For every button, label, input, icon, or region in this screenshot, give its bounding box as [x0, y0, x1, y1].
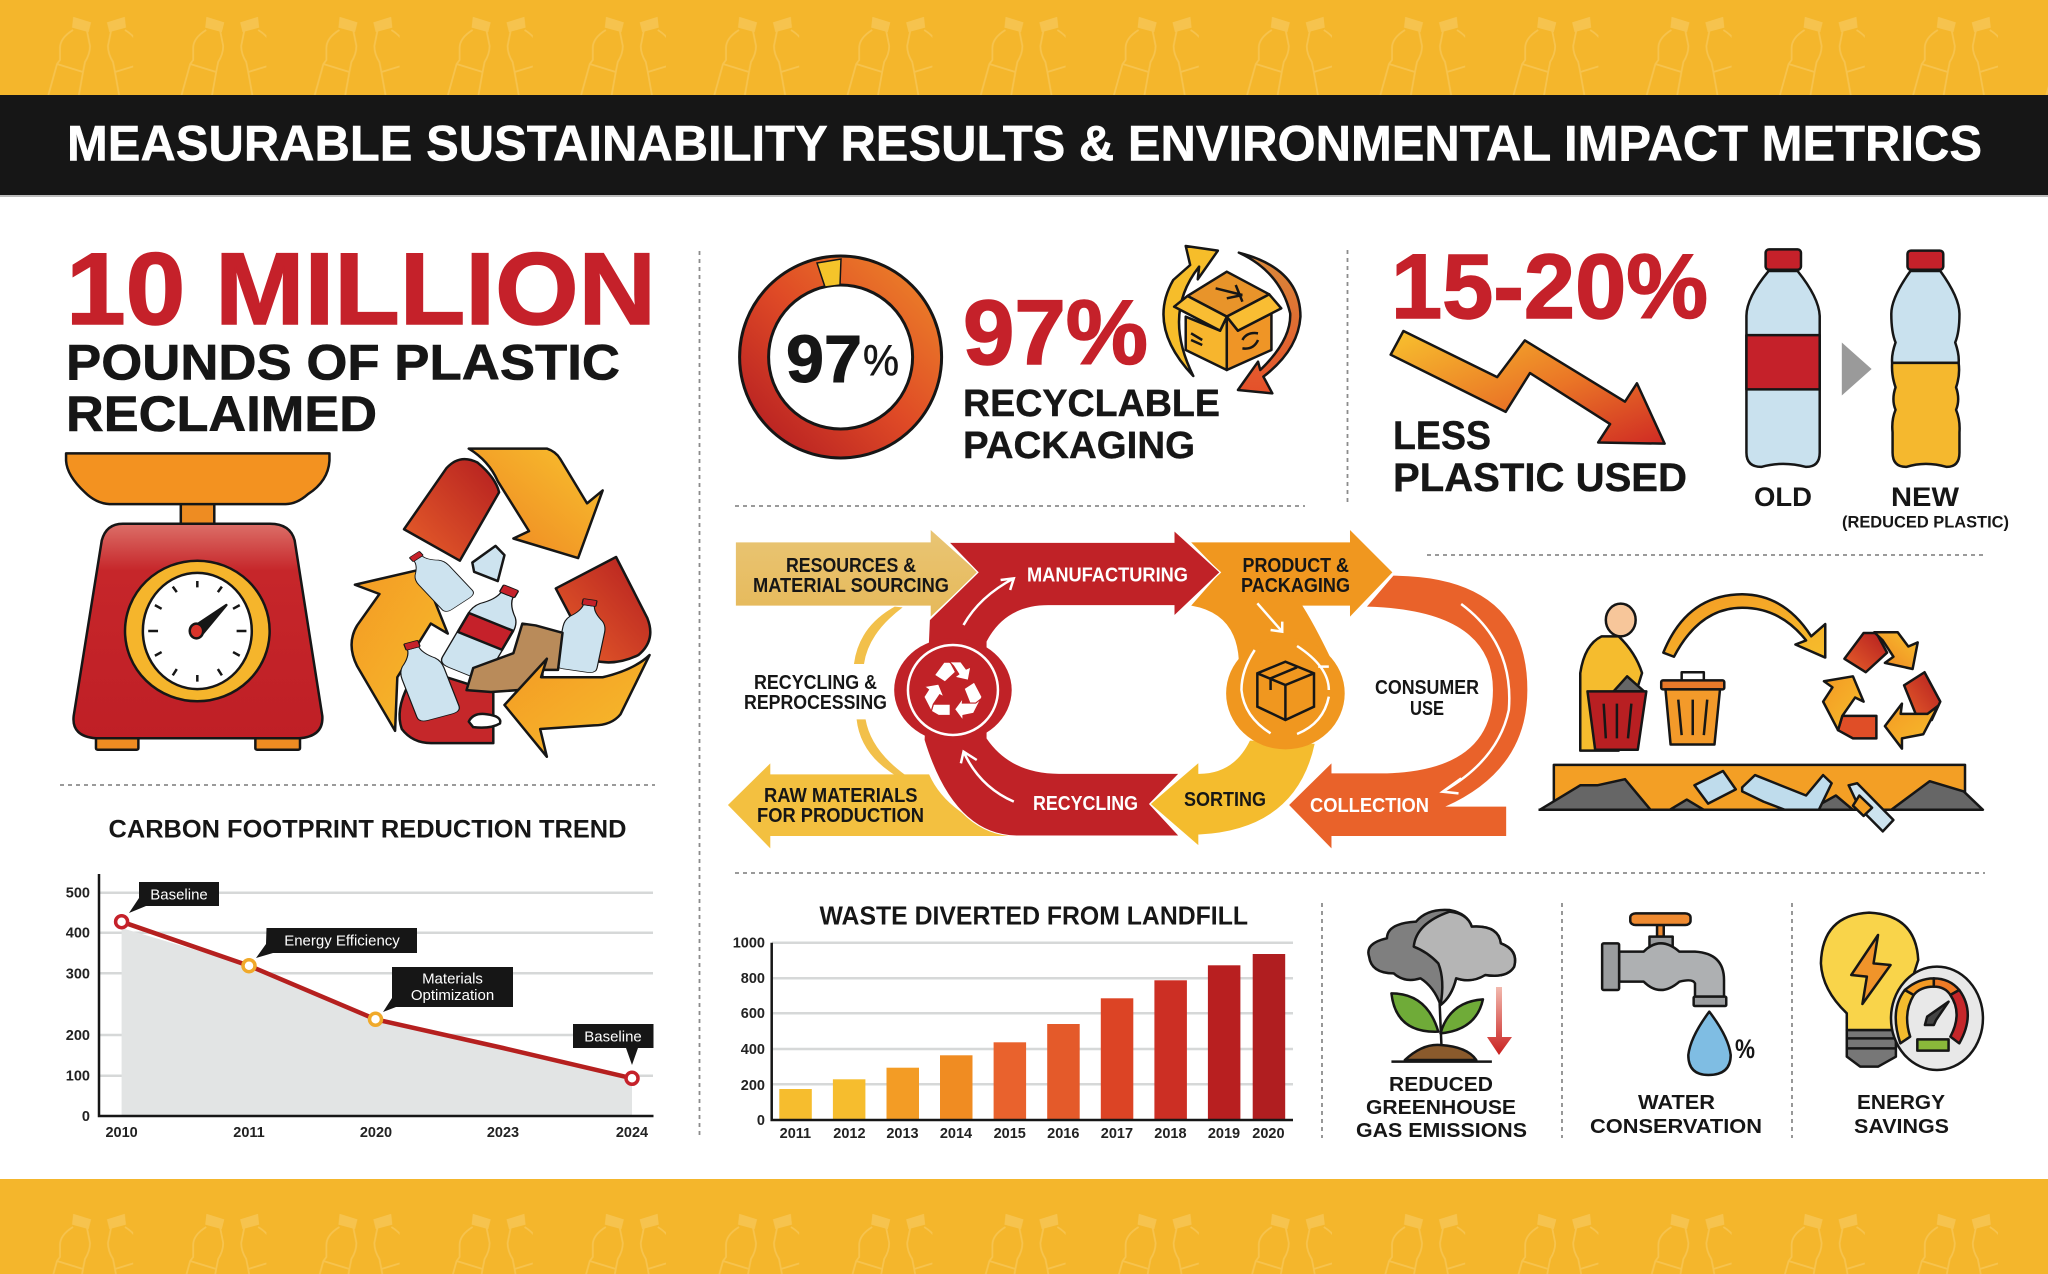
callout: baseline end: Baseline: [584, 1028, 642, 1046]
top banner: [0, 0, 2048, 95]
node: recycling: [894, 638, 1012, 742]
callout: baseline start: Baseline: [150, 886, 208, 904]
x axis labels: 2020: [1252, 1126, 1285, 1142]
y axis labels: [66, 886, 90, 1125]
label: product and packaging: PRODUCT &: [1242, 554, 1349, 577]
x axis labels: 2010: [105, 1125, 138, 1141]
label: raw materials: RAW MATERIALS: [764, 784, 918, 807]
panel: waste bar chart: [733, 900, 1293, 1142]
panel: circular economy loop: USE: [1410, 698, 1444, 720]
y axis labels: 0: [82, 1109, 90, 1125]
callout: baseline start: [129, 882, 219, 913]
illustration: person sorting waste: [1539, 594, 1983, 831]
big number: 15-20%: 15-20%: [1391, 236, 1708, 338]
axes: [99, 874, 654, 1116]
y axis labels: 300: [66, 966, 90, 982]
panel: circular economy loop: REPROCESSING: [744, 692, 887, 714]
y axis labels: 200: [741, 1078, 765, 1094]
x axis labels: 2014: [940, 1126, 972, 1142]
label: old: OLD: [1754, 482, 1812, 512]
x axis labels: 2020: [360, 1125, 392, 1141]
label: ENERGY: [1857, 1091, 1945, 1114]
bars: [779, 954, 1285, 1120]
chart title: WASTE DIVERTED FROM LANDFILL: [820, 900, 1248, 930]
label: plastic used: PLASTIC USED: [1393, 456, 1687, 500]
panel: less plastic used: [1391, 236, 2009, 532]
label: [1854, 1091, 1949, 1138]
callout: energy efficiency: Energy Efficiency: [284, 932, 400, 950]
trend line: [122, 922, 632, 1078]
arrow: sorting: [1150, 740, 1316, 847]
icon: light bulb and gauge: [1821, 913, 1983, 1070]
icon: curved arrow: [1663, 594, 1825, 658]
title bar: [0, 95, 2048, 197]
node: packaging: [1226, 637, 1345, 749]
label: resources and material sourcing: RESOURCES &: [786, 554, 916, 577]
label: REDUCED: [1389, 1073, 1493, 1096]
icon: white recycling symbol: [924, 662, 982, 721]
x axis labels: 2019: [1208, 1126, 1240, 1142]
y axis labels: 100: [66, 1068, 90, 1084]
donut chart: [740, 256, 942, 458]
y axis labels: 600: [741, 1006, 765, 1022]
x axis labels: [780, 1126, 1285, 1142]
x axis labels: 2012: [833, 1126, 866, 1142]
icon: kitchen scale: [66, 453, 329, 750]
y axis labels: 200: [66, 1028, 90, 1044]
label: recycling: RECYCLING: [1033, 793, 1138, 815]
panel: plastic reclaimed: [66, 232, 656, 757]
panel: carbon footprint line chart: [66, 816, 654, 1141]
icon: new bottle: [1891, 251, 1960, 467]
icon: arrow between bottles: [1842, 342, 1872, 396]
icon: old bottle: [1746, 249, 1820, 467]
data points: [116, 916, 638, 1084]
label: reduced plastic: (REDUCED PLASTIC): [1842, 512, 2009, 532]
panel: greenhouse gas: [1356, 910, 1527, 1142]
x axis labels: 2011: [233, 1125, 265, 1141]
label: GAS EMISSIONS: [1356, 1119, 1527, 1142]
x axis labels: 2013: [886, 1126, 919, 1142]
big number: 10 million: 10 MILLION: [66, 232, 656, 346]
panel: circular economy loop: MATERIAL SOURCING: [753, 574, 949, 597]
y axis labels: 400: [66, 926, 90, 942]
label: sorting: SORTING: [1184, 789, 1266, 811]
y axis labels: 1000: [733, 936, 765, 952]
label: [1356, 1073, 1527, 1142]
callout: materials optimization: Optimization: [411, 987, 494, 1004]
y axis labels: 0: [757, 1113, 765, 1129]
x axis labels: 2024: [616, 1125, 648, 1141]
arrow: resources: [736, 530, 978, 617]
donut chart: 97: [786, 322, 862, 397]
title bar: MEASURABLE SUSTAINABILITY RESULTS & ENVIRONMENTAL IMPACT METRICS: [67, 116, 1982, 172]
percent sign: %: [1735, 1034, 1755, 1064]
chart title: CARBON FOOTPRINT REDUCTION TREND: [108, 816, 626, 844]
icon: zigzag down arrow: [1391, 331, 1665, 444]
axes: [772, 943, 1293, 1120]
icon: landfill: [1539, 765, 1983, 831]
label: CONSERVATION: [1590, 1115, 1762, 1138]
gridlines: [99, 893, 653, 1076]
y axis labels: 800: [741, 971, 765, 987]
loop shapes: [728, 530, 1527, 848]
icon: down arrow: [1487, 987, 1512, 1055]
thin gold connector: [854, 607, 905, 775]
heading: pounds of plastic: POUNDS OF PLASTIC: [66, 334, 620, 390]
label: collection: COLLECTION: [1310, 794, 1429, 817]
big number: 97%: 97%: [963, 282, 1148, 384]
label: GREENHOUSE: [1366, 1096, 1516, 1119]
icon: person: [1580, 604, 1646, 751]
label: [1590, 1091, 1762, 1138]
x axis labels: [105, 1125, 648, 1141]
arrow: product and packaging: [1191, 530, 1392, 660]
x axis labels: 2023: [487, 1125, 519, 1141]
y axis labels: [733, 936, 765, 1129]
callout: baseline end: [573, 1024, 654, 1065]
x axis labels: 2017: [1101, 1126, 1133, 1142]
icon: faucet and drop: [1602, 913, 1731, 1075]
icon: smoke cloud and plant: [1368, 910, 1515, 1062]
panel: circular economy loop: [728, 530, 1527, 848]
x axis labels: 2011: [780, 1126, 811, 1142]
donut chart: %: [863, 336, 899, 385]
panel: water conservation: [1590, 913, 1762, 1138]
icon: box with recycling arrows: [1163, 246, 1300, 393]
icon: small recycling symbol: [1823, 632, 1940, 749]
label: less: LESS: [1393, 414, 1491, 458]
x axis labels: 2015: [994, 1126, 1026, 1142]
bottom banner: [0, 1179, 2048, 1274]
panel: energy savings: [1821, 913, 1983, 1138]
x axis labels: 2016: [1047, 1126, 1079, 1142]
icon: orange bin: [1661, 672, 1724, 744]
callout: materials optimization: [383, 967, 513, 1012]
label: recyclable: RECYCLABLE: [963, 383, 1220, 425]
label: packaging: PACKAGING: [963, 425, 1195, 467]
arrow: raw materials: [728, 763, 1014, 848]
x axis labels: 2018: [1154, 1126, 1187, 1142]
panel: circular economy loop: FOR PRODUCTION: [757, 804, 924, 827]
band: consumer use and collection: [1289, 576, 1527, 848]
y axis labels: 400: [741, 1042, 765, 1058]
label: SAVINGS: [1854, 1115, 1949, 1138]
icon: recycling arrows with bottles: [352, 449, 650, 757]
label: WATER: [1638, 1091, 1715, 1114]
panel: circular economy loop: PACKAGING: [1241, 574, 1350, 597]
label: manufacturing: MANUFACTURING: [1027, 564, 1188, 586]
y axis labels: 500: [66, 886, 90, 902]
callout: materials optimization: Materials: [422, 970, 483, 988]
area under line: [122, 928, 632, 1116]
callout: energy efficiency: [256, 928, 417, 958]
label: consumer use: CONSUMER: [1375, 677, 1479, 699]
label: recycling and reprocessing: RECYCLING &: [754, 672, 877, 694]
band: manufacturing and recycling: [924, 530, 1220, 836]
label: new: NEW: [1891, 482, 1960, 512]
panel: recyclable packaging: [740, 246, 1300, 467]
heading: reclaimed: RECLAIMED: [66, 386, 377, 442]
